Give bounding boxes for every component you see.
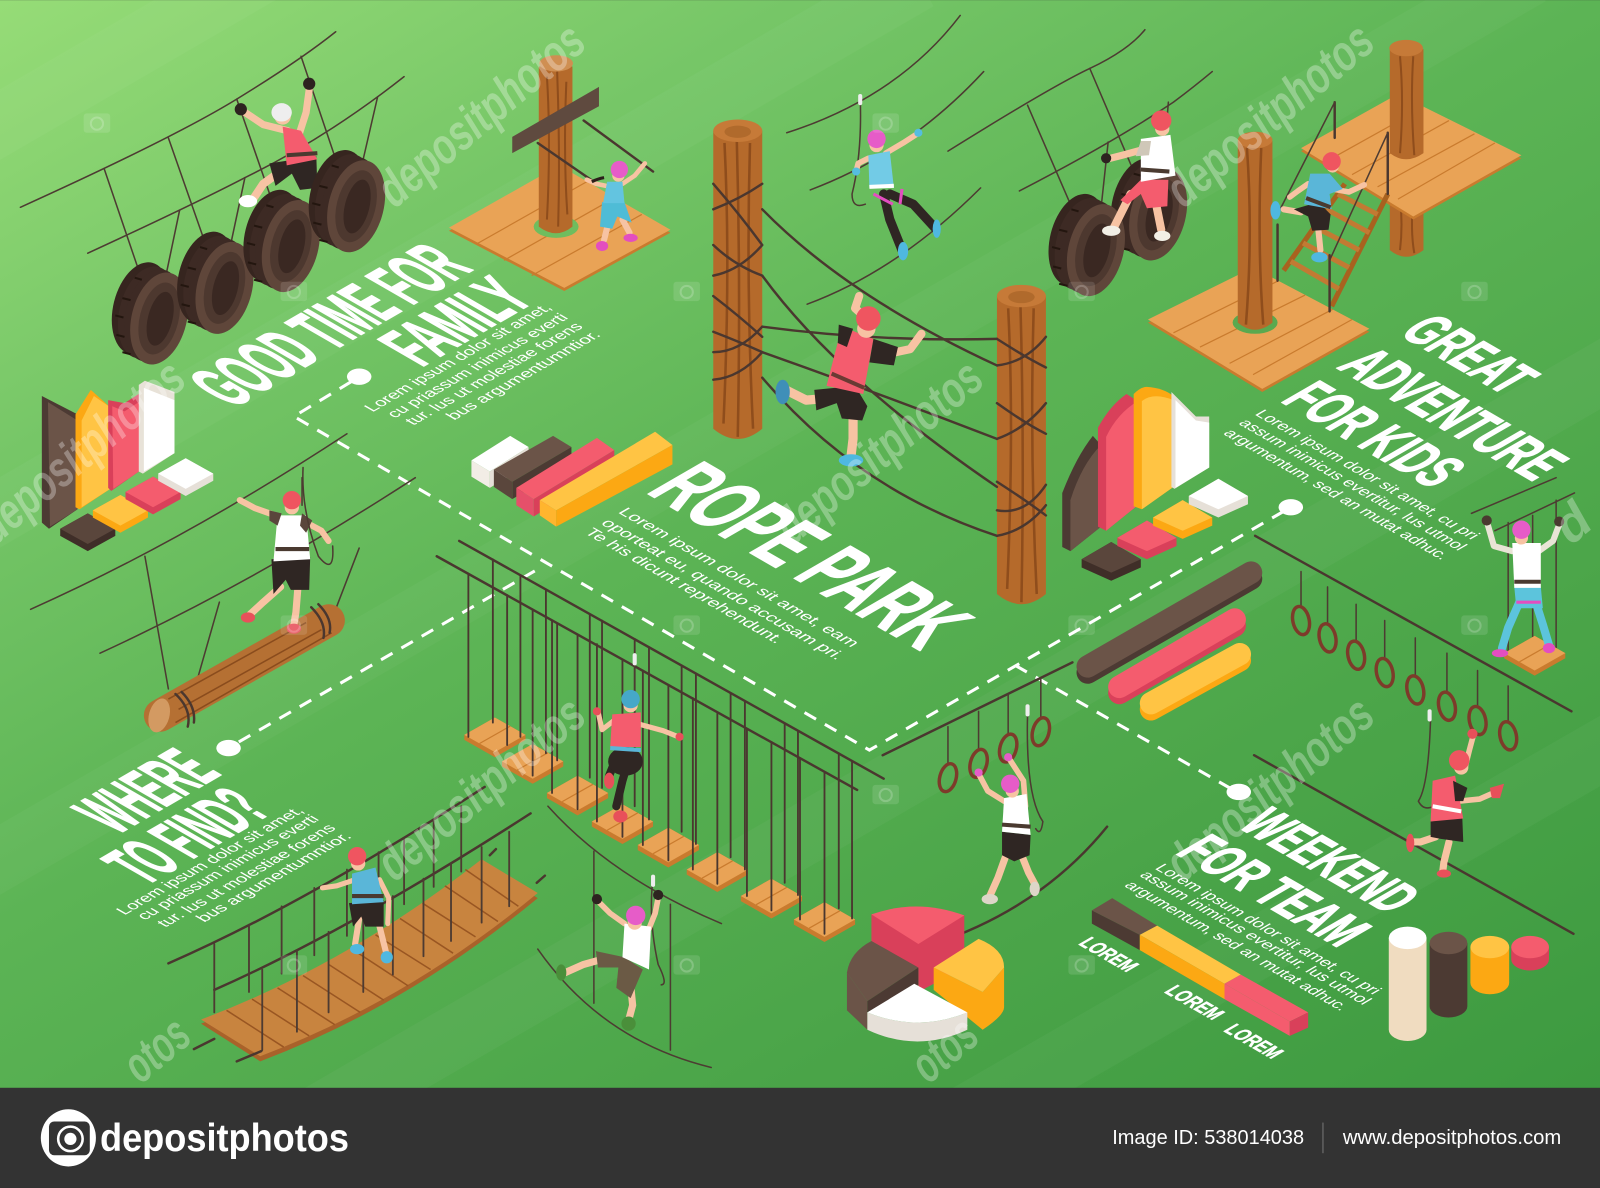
suspension bridge <box>168 787 545 1061</box>
chart: rounded capsule bars <box>1088 573 1251 709</box>
family description: Lorem ipsum dolor sit amet, <box>360 301 556 414</box>
chart: isometric pie <box>847 906 1004 1041</box>
family description: bus argumentumntior. <box>442 328 605 423</box>
left post <box>713 120 762 439</box>
central rope course between posts <box>713 120 1046 604</box>
heading: great adventure for kids <box>1219 306 1582 562</box>
where description: tur. lus ut molestiae forens <box>153 822 340 930</box>
heading: great adventure for kids: FOR KIDS <box>1267 373 1480 496</box>
chart: stacked bar with labels: LOREM <box>1073 934 1144 975</box>
family description <box>360 301 605 428</box>
heading: good time for family <box>170 233 605 428</box>
gymnastic rings obstacle with woman <box>883 662 1107 944</box>
tire swing with man <box>948 30 1212 302</box>
person on tires <box>235 78 317 207</box>
heading: where to find: TO FIND? <box>86 778 288 894</box>
woman on plank bridge <box>593 653 684 823</box>
heading: good time for family: FAMILY <box>362 267 551 376</box>
watermarks: depositphotos <box>763 348 994 554</box>
where description <box>112 804 356 930</box>
watermarks: depositphotos <box>1154 685 1385 891</box>
chart: arched columns with tiles <box>1062 387 1248 581</box>
text: GOOD TIME FOR <box>170 233 490 417</box>
rope park description: Lorem ipsum dolor sit amet, eam <box>614 505 864 650</box>
team description: argumentum, sed an mutat adhuc. <box>1120 879 1353 1013</box>
image id: Image ID: 538014038 <box>1112 1127 1304 1149</box>
man on log <box>240 467 333 634</box>
chart: stacked bar with labels <box>1073 898 1308 1062</box>
watermarks: depositphotos <box>365 685 596 891</box>
chart: arrow columns with tiles <box>42 381 213 551</box>
rings row and walking man <box>1254 536 1573 934</box>
watermarks: otos <box>899 1005 989 1093</box>
team description: assum inimicus evertitur, lus utmol <box>1135 869 1375 1007</box>
title: rope park <box>580 449 994 662</box>
team description: Lorem ipsum dolor sit amet, cu pri <box>1151 861 1385 997</box>
child on ladder <box>1270 152 1364 262</box>
chart: stacked bar with labels: LOREM <box>1218 1021 1289 1062</box>
double rope obstacle with woman <box>538 806 721 1067</box>
log balance obstacle <box>31 434 415 735</box>
man on bridge <box>322 847 393 963</box>
website url: www.depositphotos.com <box>1342 1127 1561 1149</box>
family description: tur. lus ut molestiae forens <box>401 320 587 428</box>
kids description: Lorem ipsum dolor sit amet, cu pri <box>1251 407 1484 542</box>
climber on rope net <box>776 296 921 466</box>
heading: weekend for team: WEEKEND <box>1225 800 1435 921</box>
right post <box>997 285 1046 604</box>
chart: cylinders <box>1389 927 1549 1041</box>
hanging planks bridge <box>437 541 884 942</box>
where description: cu priassum inimicus everti <box>133 813 323 923</box>
icon: camera logo <box>41 1109 96 1166</box>
chart: stepped isometric bars <box>471 432 672 527</box>
swing plank with woman in blue trousers <box>1471 478 1574 676</box>
rope park description: Te his dicunt reprehendunt. <box>580 526 788 646</box>
family description: cu priassum inimicus everti <box>383 311 572 420</box>
kids description: argumentum, sed an mutat adhuc. <box>1219 427 1454 562</box>
zipline obstacle with woman <box>787 15 984 304</box>
ladder <box>1278 102 1388 311</box>
footer bar <box>0 1088 1600 1188</box>
watermarks: otos <box>111 1005 201 1093</box>
where description: Lorem ipsum dolor sit amet, <box>112 804 308 917</box>
tower platforms with ladder <box>1148 40 1521 392</box>
tire swing obstacle <box>20 32 404 371</box>
heading: weekend for team: FOR TEAM <box>1163 826 1386 955</box>
chart: stacked bar with labels: LOREM <box>1159 982 1230 1023</box>
where description: bus argumentumntior. <box>192 830 356 925</box>
heading: where to find <box>55 738 356 930</box>
dashed connector lines <box>216 368 1303 800</box>
rope park description <box>580 505 864 662</box>
title: rope park: ROPE PARK <box>628 449 994 661</box>
platform with post and plank <box>449 55 670 291</box>
logo wordmark: depositphotos <box>100 1117 349 1160</box>
rope park description: oporteat eu, quando accusam pri. <box>597 517 849 662</box>
girl on platform <box>587 161 645 251</box>
kids description: assum inimicus evertitur, lus utmol <box>1234 417 1471 553</box>
heading: weekend for team <box>1120 800 1435 1013</box>
heading: where to find: WHERE <box>55 738 237 843</box>
